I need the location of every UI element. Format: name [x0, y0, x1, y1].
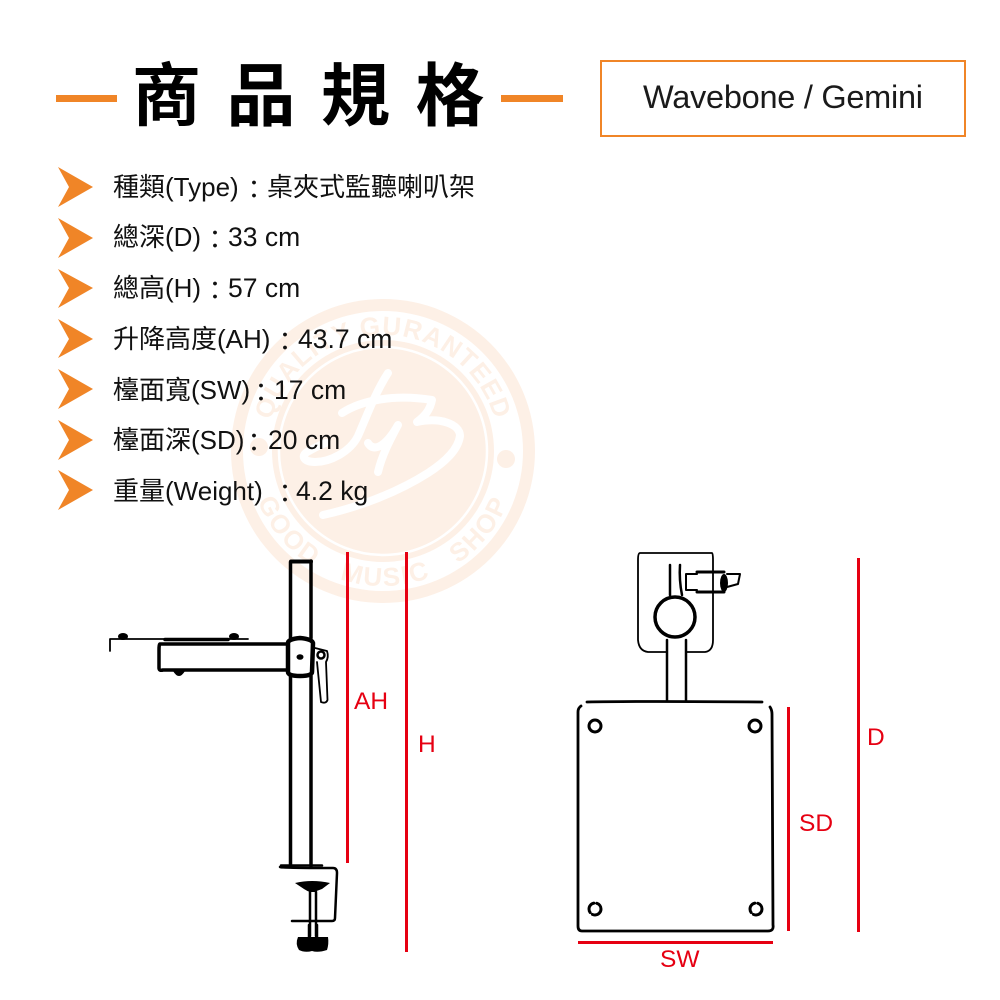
spec list — [58, 167, 475, 511]
dimension line: AH — [346, 552, 349, 863]
spec: surface depth: ： — [241, 423, 267, 460]
label: D: D — [867, 724, 885, 751]
spec: weight: 重量(Weight) — [113, 476, 263, 506]
spec: type: 桌夾式監聽喇叭架 — [267, 167, 475, 204]
label: AH: AH — [354, 688, 388, 715]
icon: arrow bullet 1 — [58, 167, 93, 207]
pole — [667, 640, 686, 701]
spec: surface width: ： — [248, 373, 274, 410]
spec: surface width: 17 cm — [274, 375, 346, 405]
locking knob — [686, 572, 740, 592]
pole — [290, 561, 311, 866]
heading rule left — [56, 95, 117, 102]
desk plate — [578, 702, 773, 931]
spec: surface width: 檯面寬(SW) — [113, 375, 250, 405]
mounting holes — [589, 720, 762, 915]
spec: surface depth: 20 cm — [268, 425, 340, 455]
collar — [655, 597, 695, 637]
desk clamp — [280, 866, 337, 952]
label: SW: SW — [660, 946, 700, 973]
icon: arrow bullet 3 — [58, 269, 93, 308]
tray plate — [110, 633, 248, 651]
dimension line: SW — [578, 941, 773, 944]
icon: arrow bullet 6 — [58, 420, 93, 460]
spec: adjustable height: 43.7 cm — [298, 324, 392, 354]
heading rule right — [501, 95, 563, 102]
neck — [670, 565, 682, 595]
spec: height: 總高(H) — [113, 273, 201, 303]
icon: arrow bullet 2 — [58, 218, 93, 258]
arm and collar — [159, 638, 313, 676]
side view drawing of stand — [110, 561, 337, 952]
spec: adjustable height: ： — [272, 322, 298, 359]
spec: height: ： — [202, 271, 228, 308]
dimension line: SD — [787, 707, 790, 931]
model name box — [601, 61, 965, 136]
spec: weight: 4.2 kg — [296, 476, 368, 506]
icon: arrow bullet 4 — [58, 319, 93, 358]
locking handle — [315, 648, 328, 703]
spec: depth: 總深(D) — [113, 222, 201, 252]
dimension line: H — [405, 552, 408, 952]
watermark: shop seal — [231, 299, 535, 603]
spec: weight: ： — [272, 474, 298, 511]
spec: type: ： — [241, 170, 267, 207]
spec: height: 57 cm — [228, 273, 300, 303]
front view drawing of stand — [578, 553, 773, 931]
icon: arrow bullet 5 — [58, 369, 93, 409]
spec: surface depth: 檯面深(SD) — [113, 425, 244, 455]
label: SD: SD — [799, 810, 833, 837]
clamp back plate — [638, 553, 713, 652]
watermark: shop seal: GOOD MUSIC SHOP — [260, 497, 502, 586]
watermark: shop seal: QUALITY GURANTEED — [256, 316, 509, 417]
title: 商品規格 — [132, 40, 510, 140]
spec: depth: 33 cm — [228, 222, 300, 252]
spec: depth: ： — [202, 220, 228, 257]
icon: arrow bullet 7 — [58, 470, 93, 510]
spec: type: 種類(Type) — [113, 172, 239, 202]
spec: adjustable height: 升降高度(AH) — [113, 324, 270, 354]
label: H: H — [418, 731, 436, 758]
model name box: Wavebone / Gemini — [643, 79, 923, 115]
dimension line: D — [857, 558, 860, 932]
